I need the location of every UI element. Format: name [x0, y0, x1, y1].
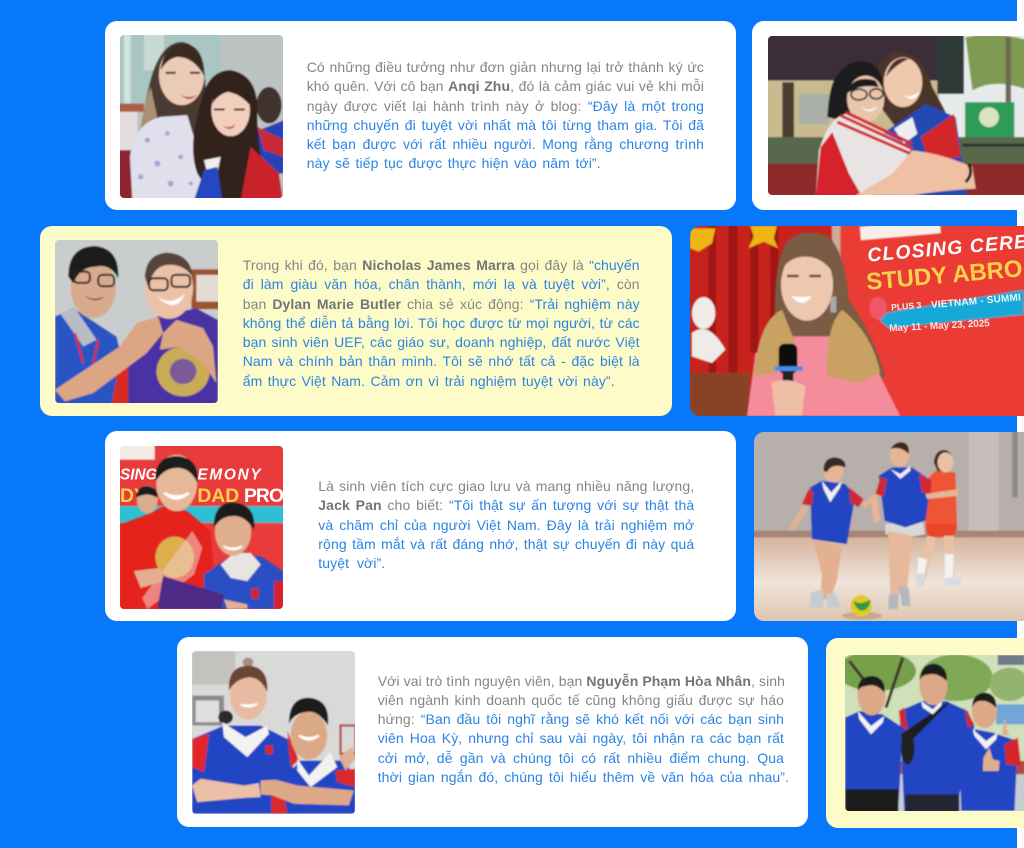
photo: two students bumping fists	[192, 651, 355, 814]
panel: hugging photo card	[752, 20, 1024, 210]
text: Anqi Zhu quote	[307, 59, 704, 171]
text: Anqi Zhu quote: những chuyến đi tuyệt vời nhất mà tôi từng tham gia. Tôi đã	[307, 117, 704, 133]
text: Nguyễn Phạm Hòa Nhân quote: viên Hoa Kỳ, nhưng chỉ sau vài ngày, tôi nhận ra các bạn rất	[378, 730, 784, 746]
photo: three students in blue polo shirts	[845, 655, 1024, 811]
photo: student speaking at closing ceremony: STUDY ABRO	[865, 255, 1024, 296]
photo: two students with a flag: DAD	[197, 485, 239, 506]
text: Nguyễn Phạm Hòa Nhân quote: cởi mở, dễ gần và chúng tôi có rất nhiều điểm chung. Qua	[378, 750, 784, 766]
text: Jack Pan quote: Jack Pan cho biết: “Tôi thật sự ấn tượng với sự thật thà	[318, 497, 694, 513]
photo: two students with a flag: SING	[120, 466, 157, 483]
panel: group photo card	[826, 638, 1024, 828]
text: Anqi Zhu quote: ngày được viết lại hành trình này ở blog: “Đây là một trong	[307, 98, 704, 114]
photo: student speaking at closing ceremony: CLOSING CERE	[867, 232, 1024, 267]
text: Nicholas and Dylan quote: bạn sinh viên UEF, các giáo sư, doanh nghiệp, đất nước Việt	[243, 334, 640, 350]
photo: two students smiling	[120, 35, 283, 198]
text: Jack Pan quote: tuyệt vời”.	[318, 555, 385, 571]
photo: two students with a flag: DY	[120, 485, 146, 506]
text: Nicholas and Dylan quote	[243, 257, 640, 389]
panel: Nicholas and Dylan testimonial	[40, 226, 672, 416]
text: Anqi Zhu quote: Có những điều tưởng như đơn giản nhưng lại trở thành ký ức	[307, 59, 704, 75]
text: Nguyễn Phạm Hòa Nhân quote: viên ngành kinh doanh quốc tế cũng không giấu được sự háo	[378, 692, 784, 708]
photo: two students with a flag: PRO	[244, 485, 282, 506]
photo: two students hugging	[768, 36, 1024, 195]
text: Anqi Zhu quote: khó quên. Với cô bạn Anqi Zhu, đó là cảm giác vui vẻ khi mỗi	[307, 78, 704, 94]
panel: Nguyễn Phạm Hòa Nhân testimonial	[176, 637, 808, 827]
photo: student speaking at closing ceremony: May 11 - May 23, 2025	[889, 318, 990, 334]
photo: two students with a flag: EMONY	[197, 466, 262, 483]
text: Nicholas and Dylan quote: Nam và chính bản thân mình. Tôi sẽ nhớ tất cả - đặc biệt là	[243, 353, 640, 369]
photo: two students making a heart	[55, 240, 218, 403]
text: Jack Pan quote: Là sinh viên tích cực giao lưu và mang nhiều năng lượng,	[318, 478, 694, 494]
text: Nguyễn Phạm Hòa Nhân quote: Với vai trò tình nguyện viên, bạn Nguyễn Phạm Hòa Nhân, sinh	[378, 672, 785, 688]
text: Nguyễn Phạm Hòa Nhân quote	[378, 672, 789, 785]
text: Anqi Zhu quote: này sẽ tiếp tục được thực hiện vào năm tới”.	[307, 155, 601, 171]
text: Nguyễn Phạm Hòa Nhân quote: hứng: “Ban đầu tôi nghĩ rằng sẽ khó kết nối với các bạn sinh	[378, 711, 784, 727]
text: Jack Pan quote: rộng tầm mắt và rất đáng nhớ, thật sự chuyến đi này quá	[318, 536, 694, 552]
panel: Anqi Zhu testimonial	[104, 20, 736, 210]
text: Anqi Zhu quote: kết bạn được với rất nhiều người. Mong rằng chương trình	[307, 136, 704, 152]
text: Nicholas and Dylan quote: đi làm giàu văn hóa, chân thành, mới lạ và tuyệt vời”, còn	[243, 276, 640, 292]
photo: student speaking at closing ceremony: VIETNAM - SUMMI	[931, 292, 1021, 311]
text: Nicholas and Dylan quote: ẩm thực Việt Nam. Cảm ơn vì trải nghiệm tuyệt vời này”.	[243, 372, 615, 388]
text: Jack Pan quote	[318, 478, 694, 571]
photo: two students with a flag	[120, 446, 283, 609]
text: Nicholas and Dylan quote: Trong khi đó, bạn Nicholas James Marra gọi đây là “chuyến	[243, 257, 640, 273]
photo: student speaking at closing ceremony: PLUS 3	[891, 300, 922, 312]
text: Nguyễn Phạm Hòa Nhân quote: thời gian ngắn đó, chúng tôi hiểu thêm về văn hóa của nhau”.	[378, 769, 789, 785]
text: Nicholas and Dylan quote: bạn Dylan Marie Butler chia sẻ xúc động: “Trải nghiệm này	[243, 296, 640, 312]
panel: Jack Pan testimonial	[104, 431, 736, 621]
photo: student speaking at closing ceremony	[690, 226, 1024, 416]
photo: students playing futsal	[754, 432, 1024, 621]
text: Jack Pan quote: và chăm chỉ của người Việt Nam. Đây là trải nghiệm mở	[318, 516, 694, 532]
text: Nicholas and Dylan quote: không thể diễn tả bằng lời. Tôi học được từ mọi người, từ các	[243, 315, 640, 331]
